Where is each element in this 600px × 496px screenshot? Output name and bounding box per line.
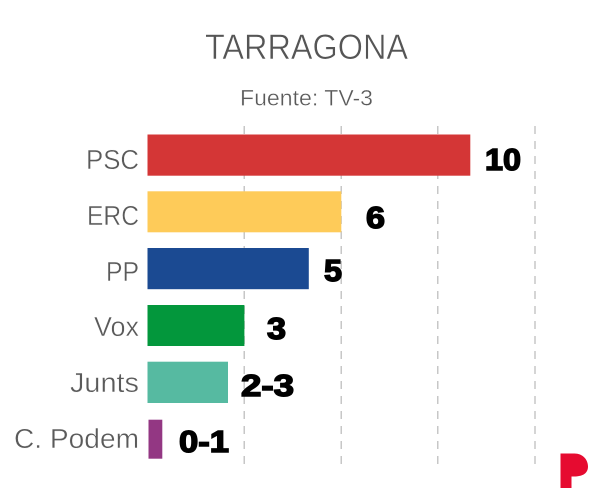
row: ERC: 6 bbox=[366, 200, 385, 235]
row: C. Podem: C. Podem bbox=[14, 423, 139, 454]
row: PSC: PSC bbox=[86, 144, 139, 175]
row: Vox: 3 bbox=[267, 311, 286, 346]
row: Vox: Vox bbox=[94, 311, 139, 342]
row: C. Podem: 0-1 bbox=[179, 424, 229, 459]
row: ERC: ERC bbox=[87, 200, 139, 231]
row: PP bbox=[106, 248, 342, 289]
icon: red P logo bbox=[560, 454, 588, 488]
row: Junts: 2-3 bbox=[241, 368, 294, 403]
row: PP: PP bbox=[106, 256, 139, 287]
row: PP: 5 bbox=[324, 253, 342, 288]
subtitle: source: Fuente: TV-3 bbox=[240, 86, 373, 110]
row: Junts bbox=[70, 362, 294, 403]
row: Junts: Junts bbox=[70, 367, 139, 398]
row: PSC bbox=[86, 134, 521, 177]
row: C. Podem bbox=[14, 420, 229, 459]
row: PSC: 10 bbox=[485, 142, 521, 177]
row: ERC bbox=[87, 191, 385, 235]
row: Vox bbox=[94, 305, 286, 346]
title: TARRAGONA bbox=[205, 28, 409, 67]
